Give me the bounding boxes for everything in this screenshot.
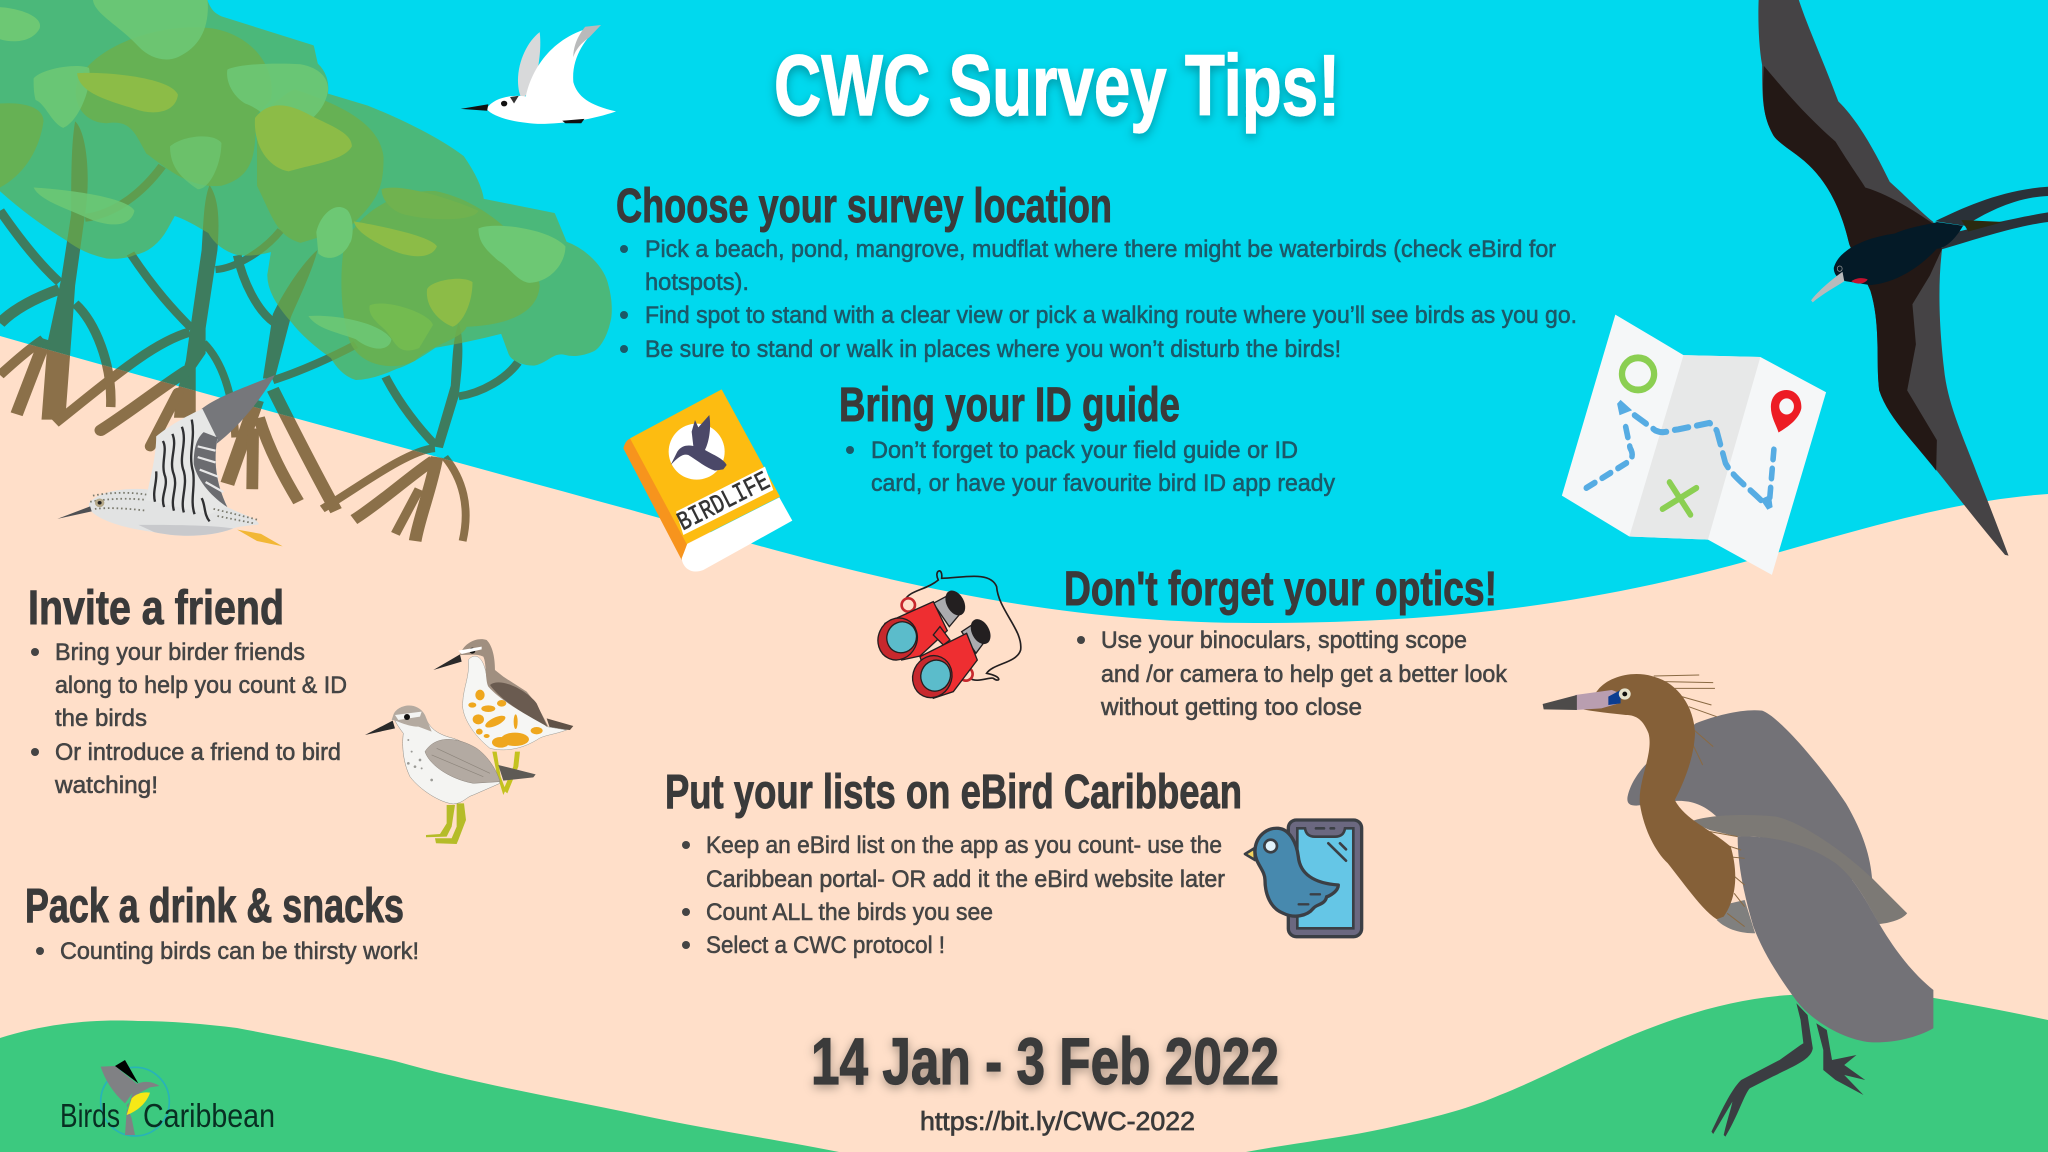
bullet list: watching! [54,772,158,799]
bullet list: card, or have your favourite bird ID app ready [871,470,1335,497]
heading: Invite a friend [28,582,284,635]
sand area [0,336,2048,1152]
bullet list: Or introduce a friend to bird [55,739,341,766]
bullet list: Keep an eBird list on the app as you count- use the [706,832,1222,859]
bullet list: Don’t forget to pack your field guide or ID [871,437,1298,464]
icon: reddish egret [1543,674,1933,1137]
bullet list: hotspots). [645,269,749,296]
heading: Pack a drink & snacks [25,880,404,933]
roots over sand [0,344,470,542]
bullet list: the birds [55,705,147,732]
heading: Bring your ID guide [839,379,1180,432]
panel: invite a friend [28,582,347,799]
bullet list: Bring your birder friends [55,639,305,666]
bullet list: and /or camera to help get a better look [1101,661,1508,688]
panel: pack a drink and snacks [25,880,419,965]
panel: put your lists on eBird Caribbean [665,766,1242,959]
icon: flying sandpiper [57,375,283,546]
logo mark [101,1060,169,1136]
heading: Put your lists on eBird Caribbean [665,766,1242,819]
logo wordmark: Birds [60,1097,120,1134]
icon: binoculars [871,571,1021,704]
bullet list [31,639,347,799]
title: CWC Survey Tips! [774,38,1340,134]
icon: phone with bird [1245,820,1362,937]
bullet list: Pick a beach, pond, mangrove, mudflat where there might be waterbirds (check eBird for [645,236,1556,263]
panel: don't forget your optics [1064,563,1508,721]
panel: choose your survey location [616,180,1577,363]
logo: Birds Caribbean [60,1060,275,1136]
bullet list: Select a CWC protocol ! [706,932,945,959]
bullet list: Caribbean portal- OR add it the eBird website later [706,866,1225,893]
mangrove trees [0,0,610,541]
green ground left [0,1020,839,1152]
bullet list [846,437,1335,497]
bullet list: Counting birds can be thirsty work! [60,938,419,965]
trunks over water [0,122,522,462]
icon: birdlife book [623,389,792,571]
bullet list: Be sure to stand or walk in places where you won’t disturb the birds! [645,336,1341,363]
date: 14 Jan - 3 Feb 2022 [811,1024,1279,1098]
logo wordmark: Caribbean [143,1097,275,1134]
bullet list: along to help you count & ID [55,672,347,699]
green ground right [1246,993,2048,1152]
bullet list: without getting too close [1100,694,1362,721]
bullet list [1077,627,1508,721]
bullet list: Find spot to stand with a clear view or pick a walking route where you’ll see birds as you go. [645,302,1577,329]
heading: Choose your survey location [616,180,1112,233]
bullet list [682,832,1225,959]
canopy [0,0,610,379]
icon: two shorebirds [365,639,573,844]
bullet list: Count ALL the birds you see [706,899,993,926]
icon: flying white tern [461,25,616,124]
bullet list [620,236,1577,363]
bullet list: Use your binoculars, spotting scope [1101,627,1467,654]
icon: birdlife book: BIRDLIFE [673,467,775,539]
link: https://bit.ly/CWC-2022 [920,1106,1195,1136]
heading: Don't forget your optics! [1064,563,1497,616]
panel: bring your ID guide [839,379,1335,497]
icon: folded map [1562,315,1826,575]
icon: frigatebird [1758,0,2048,556]
